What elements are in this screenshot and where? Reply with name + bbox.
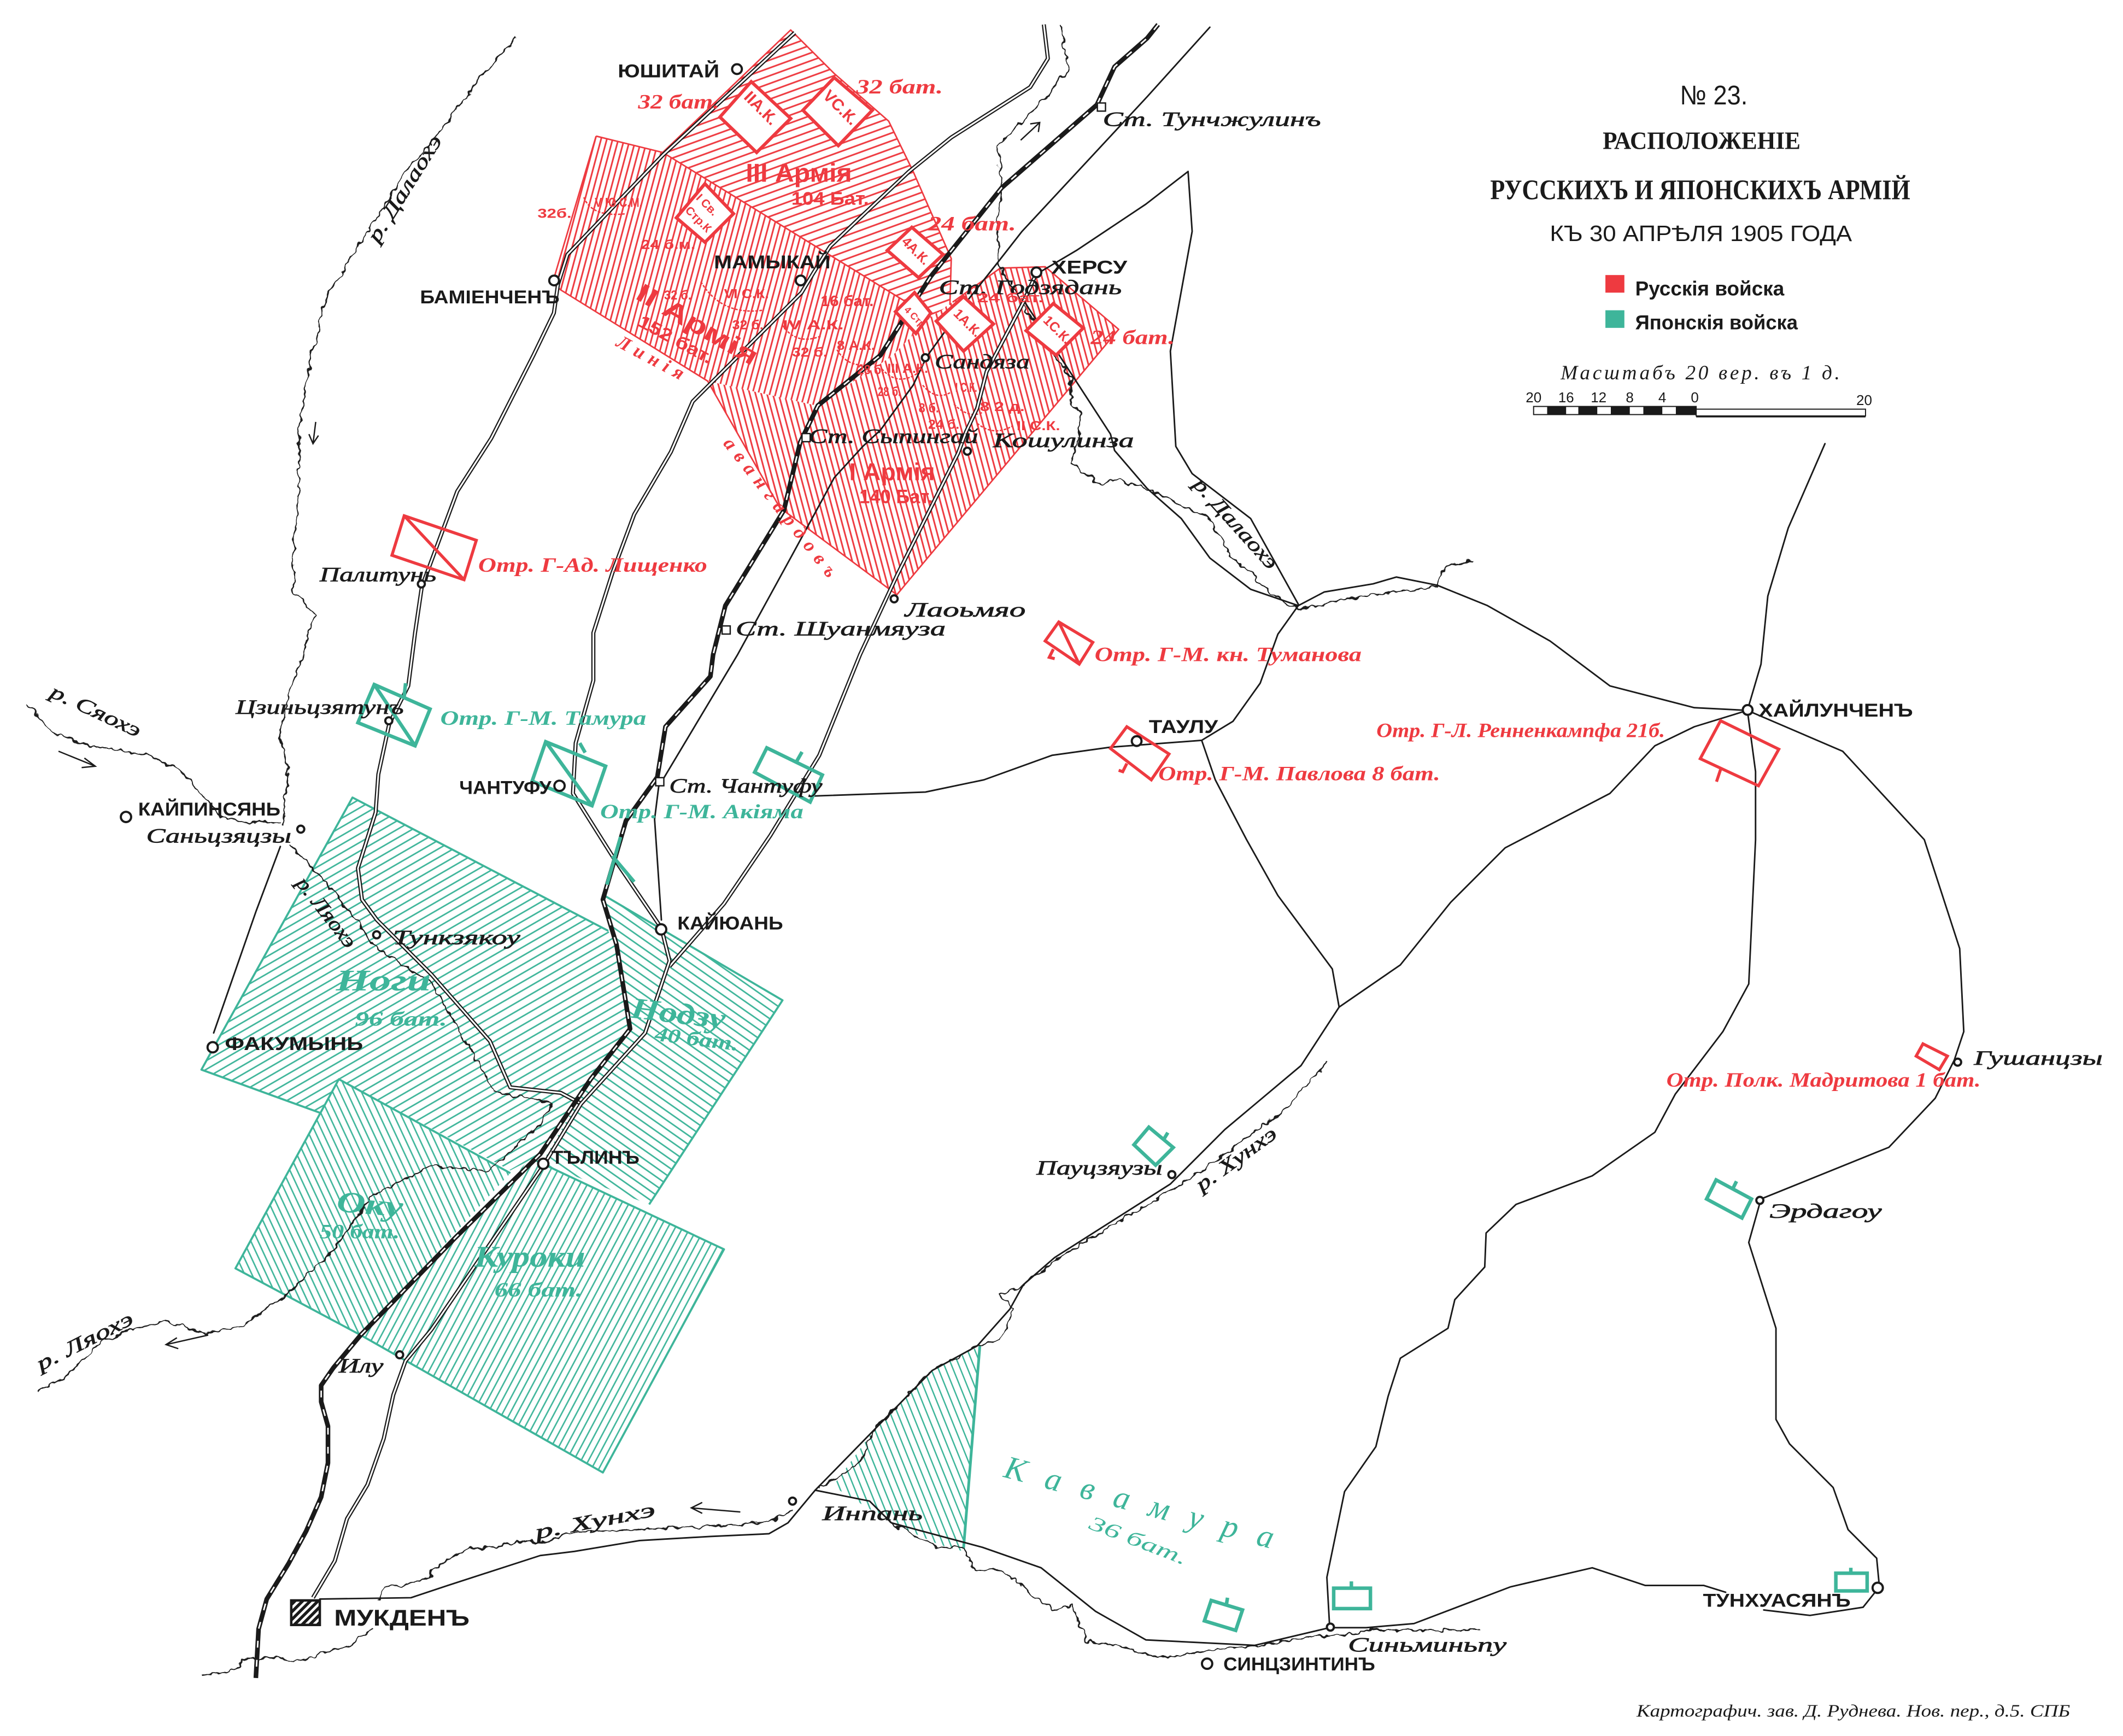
box: I A.K.: [936, 297, 994, 351]
detachment: Tunhuasyan: [1836, 1568, 1867, 1591]
river names: р. Далаохэ: [362, 131, 447, 248]
detachment: Chantufu: [755, 748, 822, 802]
box: 4 Str.: [895, 292, 931, 333]
Russian army titles and small corps notes: 32б.: [537, 207, 572, 221]
station and village names: Ст. Шуанмяуза: [736, 618, 946, 640]
box: I Sv. Str. K.: [676, 184, 734, 242]
Russian battalion counts and detachment labels: 32 бат.: [637, 91, 719, 113]
Russian army titles and small corps notes: 28 б.: [858, 363, 884, 378]
detachment: Tumanov: [1045, 622, 1093, 664]
town names in capitals: МУКДЕНЪ: [334, 1605, 470, 1631]
station and village names: Цзиньцзятунъ: [235, 696, 404, 719]
road network: [214, 25, 1964, 1678]
station and village names: Палитунь: [319, 564, 436, 586]
station and village names: Саньцзяцзы: [146, 825, 291, 848]
box: I S.K.: [1026, 303, 1083, 355]
detachment: Lishchenko: [392, 516, 476, 580]
scale numbers: 16: [1558, 389, 1574, 406]
station and village names: Ст. Чантуфу: [669, 775, 823, 797]
station and village names: Лаоьмяо: [904, 599, 1025, 621]
station and village names: Ст. Тунчжулинъ: [1103, 109, 1321, 131]
detachment: Rennenkampf: [1700, 721, 1779, 786]
detachment: Sinminpu: [1334, 1581, 1370, 1609]
Russian army titles and small corps notes: 8 б.: [919, 401, 939, 415]
town names in capitals: [138, 60, 1913, 1675]
front line captions: Линія: [612, 330, 688, 384]
river: Lyaohe: [38, 844, 553, 1391]
railway: [256, 25, 1158, 1678]
legend: Russian troops: Русскія войска: [1635, 277, 1785, 300]
box: I S.K.: 1С.К.: [1040, 313, 1075, 347]
scale numbers: [1526, 389, 1872, 408]
Russian army titles and small corps notes: 28 б.: [878, 385, 901, 400]
title number: № 23.: [1680, 80, 1747, 110]
river names: [31, 131, 1282, 1545]
title line 3: КЪ 30 АПРѢЛЯ 1905 ГОДА: [1550, 221, 1852, 246]
scale ruler: [1534, 407, 1866, 417]
zone: 2nd army: [553, 136, 931, 406]
scale numbers: 0: [1691, 389, 1699, 406]
Japanese army zones: [201, 797, 980, 1551]
scale numbers: 12: [1591, 389, 1606, 406]
town names in capitals: КАЙПИНСЯНЬ: [138, 798, 280, 820]
Russian army titles and small corps notes: 24 бат.: [977, 291, 1044, 306]
box: 4 A.K.: 4А.К.: [899, 234, 933, 268]
Russian army titles and small corps notes: II С.К.: [1017, 419, 1060, 433]
river names: р. Далаохэ: [1187, 472, 1282, 574]
box: I Sv. Str. K.: Стр.К: [683, 204, 714, 235]
Japanese labels: 40 бат.: [653, 1023, 740, 1055]
Russian army titles and small corps notes: 152 бат.: [635, 312, 716, 368]
river names: р. Сяохэ: [45, 679, 144, 742]
town names in capitals: ХЕРСУ: [1051, 257, 1128, 278]
town names in capitals: ТЪЛИНЪ: [552, 1147, 640, 1168]
Russian battalion counts and detachment labels: 24 бат.: [927, 213, 1016, 235]
Russian army titles and small corps notes: V Ю.С.М.: [595, 196, 642, 210]
scale bar: [1526, 362, 1872, 417]
Japanese labels: Отр. Г-М. Акіяма: [600, 801, 804, 823]
cartographer credit: Картографич. зав. Д. Руднева. Нов. пер., д.5. СПБ: [1636, 1700, 2070, 1720]
title line 2: РУССКИХЪ И ЯПОНСКИХЪ АРМІЙ: [1490, 174, 1910, 206]
river names: р. Ляохэ: [290, 871, 361, 953]
road: southern trunk: [815, 1490, 1726, 1645]
Kawamura zone east edge: [964, 1346, 980, 1549]
Russian battalion counts and detachment labels: Отр. Полк. Мадритова 1 бат.: [1667, 1069, 1981, 1092]
legend: Japanese troops: Японскія войска: [1635, 310, 1798, 333]
Oku zone outline: [236, 1079, 511, 1335]
detachments placed from overview: [755, 721, 1779, 1165]
station and village names: Инпань: [822, 1503, 923, 1525]
Japanese labels: Кавамура: [1000, 1448, 1279, 1556]
town names in capitals: БАМІЕНЧЕНЪ: [420, 287, 560, 308]
Nogi zone outline: [201, 797, 608, 1113]
Russian army titles and small corps notes: III Армія: [746, 159, 852, 187]
station and village names: Ст. Сыпингай: [809, 426, 978, 448]
river direction arrows: [58, 122, 1040, 1514]
Japanese labels: 50 бат.: [320, 1221, 400, 1243]
rivers: [27, 25, 1482, 1675]
scale numbers: 4: [1658, 389, 1666, 406]
road: Taulu south: [320, 740, 1339, 1599]
scale numbers: 8: [1626, 389, 1634, 406]
double road: Khersu to Kaiyuan: [670, 275, 1036, 966]
box: II A.K.: [720, 81, 791, 153]
zone: Nodzu army: [542, 895, 783, 1204]
river: Dalyaohe east: [998, 25, 1475, 609]
zone: 3rd army: [663, 30, 951, 317]
river: Hunhe upper: [819, 1061, 1327, 1489]
Kaiyuan flank marker: [607, 837, 634, 884]
detachment: Madritov: [1916, 1044, 1948, 1070]
river names: р. Хунхэ: [1189, 1122, 1281, 1198]
Japanese labels: Оку: [336, 1184, 405, 1223]
Russian army titles and small corps notes: 8 А.К.: [837, 339, 875, 353]
zone: 1st army: [708, 267, 1119, 595]
Russian army titles and small corps notes: I С.К.: [955, 381, 977, 395]
corps arcs: [584, 197, 1012, 431]
box: 4 Str.: 4 Стр.: [902, 304, 930, 332]
station and village names: Кошулинза: [992, 430, 1134, 452]
Russian army titles and small corps notes: III А.К.: [887, 362, 928, 376]
road: junction to Hailunchen: [1339, 711, 1747, 1007]
scale numbers: 20: [1856, 392, 1872, 408]
Russian battalion counts and detachment labels: 32 бат.: [855, 76, 943, 98]
zones outline: [553, 30, 1119, 595]
river: Syaohe: [27, 705, 280, 823]
detachment: Akiyama: [532, 742, 606, 806]
box: II A.K.: IIА.К.: [740, 88, 781, 129]
station and village names: Тункзякоу: [393, 927, 521, 949]
river: Hunhe west: [201, 1629, 373, 1675]
town names in capitals: СИНЦЗИНТИНЪ: [1223, 1654, 1375, 1675]
Russian battalion counts and detachment labels: 24 бат.: [1090, 327, 1175, 349]
title line 1: РАСПОЛОЖЕНІЕ: [1603, 127, 1801, 155]
Russian army titles and small corps notes: 140 Бат.: [859, 486, 933, 507]
Japanese labels: Ноги: [335, 964, 431, 997]
river: Hunhe lower: [892, 1523, 1482, 1658]
title block: [1490, 80, 1910, 246]
detachment: Erdagou: [1706, 1180, 1751, 1218]
Kuroki zone outline: [361, 1158, 724, 1473]
Japanese labels: 66 бат.: [495, 1279, 583, 1301]
box: I A.K.: 1А.К.: [951, 306, 984, 340]
zone: Kuroki army: [361, 1158, 724, 1473]
town names in capitals: ТУНХУАСЯНЪ: [1703, 1591, 1851, 1611]
Russian army titles and small corps notes: 32 б.: [664, 289, 691, 303]
Nodzu zone outline: [604, 895, 783, 1204]
road: Erdagou to Hailunchen: [1327, 444, 1825, 1626]
Russian battalion counts and detachment labels: [478, 76, 1981, 1092]
Japanese labels: [320, 707, 1279, 1570]
station and village names: Сандяза: [935, 351, 1030, 373]
zone: Oku army: [236, 1079, 511, 1335]
river: Dalyaohe west: [279, 37, 517, 825]
Russian battalion counts and detachment labels: Отр. Г-Ад. Лищенко: [478, 554, 707, 577]
box: 4 A.K.: [887, 227, 943, 278]
Japanese labels: 36 бат.: [1086, 1511, 1190, 1570]
town names in capitals: ЮШИТАЙ: [618, 60, 719, 81]
zone: Kawamura army: [833, 1346, 980, 1551]
detachment: Tamura: [358, 683, 430, 746]
detachment: Sinzintin: [1204, 1598, 1242, 1631]
detachment: Pavlov: [1111, 727, 1169, 780]
Russian army titles and small corps notes: 24 б.м.: [641, 238, 695, 253]
Russian army titles and small corps notes: [537, 159, 1060, 507]
box: I Sv. Str. K.: I Св.: [694, 192, 720, 219]
Japanese labels: Куроки: [473, 1240, 585, 1273]
double road: Yushitai to Tieling: [358, 33, 795, 1104]
Russian army zones: [553, 30, 1119, 595]
Russian army titles and small corps notes: II Армія: [631, 278, 764, 371]
double road: central route to Mukden: [313, 25, 1048, 1598]
road: north branches: [1170, 172, 1298, 604]
Russian army titles and small corps notes: 32 б.: [732, 319, 764, 333]
road: Hailunchen to Tunhuasyan: [1747, 711, 1964, 1615]
legend: [1605, 275, 1798, 333]
Russian battalion counts and detachment labels: Отр. Г-М. кн. Туманова: [1095, 644, 1362, 666]
road: Sanchiatsi to Fakumyn: [214, 847, 280, 1033]
Russian army titles and small corps notes: VI С.К.: [724, 287, 769, 301]
scale numbers: 20: [1526, 389, 1541, 406]
front line captions: авангардовъ: [719, 433, 842, 582]
road: Sandyza to Chantufu: [655, 27, 1210, 920]
box: V S.K.: VС.К.: [819, 86, 861, 129]
Russian corps boxes: [676, 78, 1083, 355]
road: Chantufu to Taulu: [810, 577, 1747, 796]
town names in capitals: МАМЫКАЙ: [714, 251, 830, 273]
Russian battalion counts and detachment labels: Отр. Г-Л. Ренненкампфа 21б.: [1376, 719, 1665, 742]
town names in capitals: ФАКУМЫНЬ: [225, 1034, 363, 1054]
Russian battalion counts and detachment labels: Отр. Г-М. Павлова 8 бат.: [1158, 763, 1440, 785]
station and village names: Илу: [338, 1355, 384, 1377]
front line captions: [612, 330, 842, 582]
Russian army titles and small corps notes: I Армія: [849, 458, 935, 485]
Japanese labels: Отр. Г-М. Тамура: [441, 707, 646, 730]
scale caption: Масштабъ 20 вер. въ 1 д.: [1560, 362, 1840, 384]
Russian army titles and small corps notes: 16 бат.: [820, 292, 873, 309]
station and village names: Пауцзяузы: [1036, 1157, 1163, 1180]
town names in capitals: ЧАНТУФУ: [459, 777, 552, 798]
river names: р. Ляохэ: [31, 1307, 137, 1376]
station and village names: Ст. Годзядань: [939, 277, 1122, 299]
river names: р. Хунхэ: [530, 1499, 657, 1545]
Japanese labels: Нодзу: [629, 991, 728, 1036]
Russian army titles and small corps notes: 24 б.: [928, 418, 959, 432]
town names in capitals: КАЙЮАНЬ: [677, 912, 783, 934]
box: V S.K.: [803, 78, 872, 145]
town names in capitals: ХАЙЛУНЧЕНЪ: [1758, 699, 1913, 721]
detachments placed from detail: [358, 516, 1948, 1631]
zone: Nogi army: [201, 797, 630, 1170]
station and village names: Гушанцзы: [1973, 1047, 2103, 1070]
town names in capitals: ТАУЛУ: [1149, 717, 1218, 737]
station and village names: Эрдагоу: [1769, 1200, 1882, 1223]
Russian army titles and small corps notes: IV А.К.: [783, 319, 844, 333]
Russian army titles and small corps notes: 32 б.: [792, 345, 828, 360]
station and village names: Синьминьпу: [1348, 1634, 1507, 1656]
Russian army titles and small corps notes: 104 Бат.: [791, 189, 869, 209]
detachment: Pautszyaozy: [1134, 1127, 1173, 1165]
Mukden marker: [291, 1600, 320, 1625]
Russian army titles and small corps notes: 8 2 д.: [980, 400, 1025, 414]
Japanese labels: 96 бат.: [355, 1008, 447, 1030]
